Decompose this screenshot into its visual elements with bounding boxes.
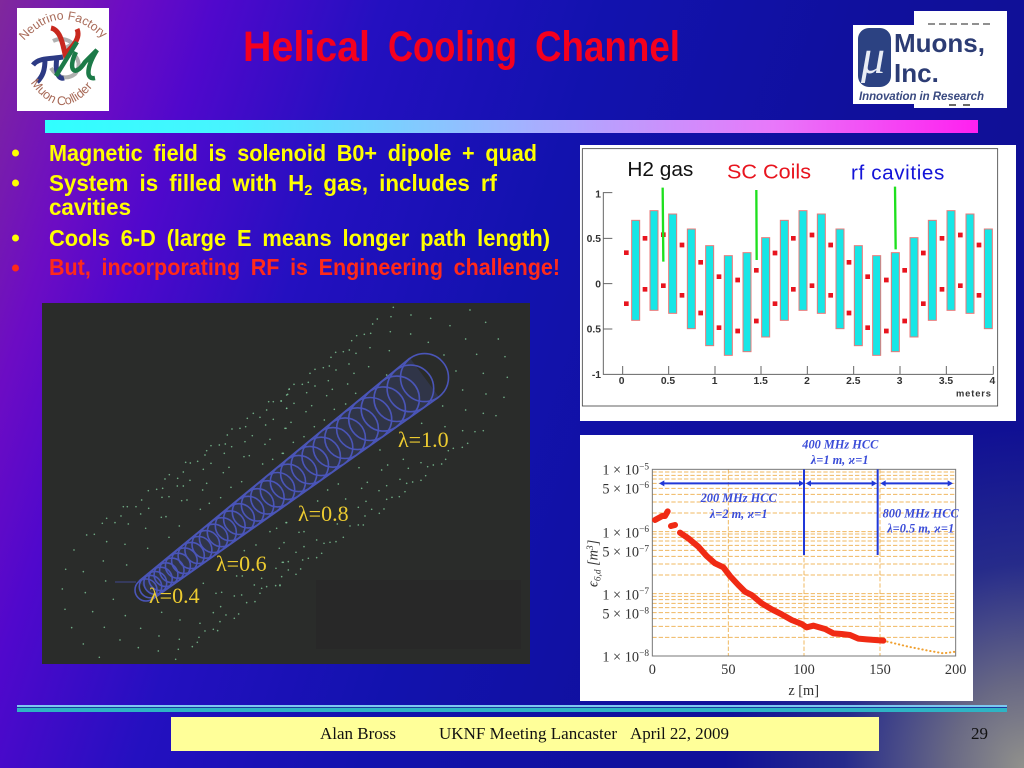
wavelength labels: λ=0.6: [216, 551, 267, 576]
axis labels: 1: [595, 190, 601, 201]
axis labels: 2: [804, 376, 810, 387]
emittance curve: [655, 511, 956, 653]
chart labels: H2 gas: [627, 158, 693, 181]
axis tick labels: 100: [793, 662, 815, 678]
frequency labels: [700, 438, 959, 536]
bullet list: System is filled with H: [49, 170, 312, 196]
axis labels: [587, 190, 995, 399]
axis tick labels: −5: [639, 462, 649, 472]
axis labels: meters: [956, 389, 991, 399]
frequency labels: λ=0.5 m, ϰ=1: [886, 522, 954, 536]
SC coil markers: [624, 235, 981, 331]
cavity bars: [632, 211, 992, 355]
axis tick labels: 1 × 10: [602, 463, 639, 479]
logo: Neutrino Factory Muon Collider: Muon Collider: [31, 78, 92, 106]
axis labels: 0: [595, 280, 601, 291]
bullet list: [12, 140, 560, 280]
green scatter dots: [62, 307, 507, 659]
footer text: April 22, 2009: [630, 724, 729, 743]
bullet list: 2: [304, 182, 312, 199]
title: Cooling: [388, 23, 517, 71]
bullet list: cavities: [49, 194, 131, 220]
logo: Muons, Inc.: μ: [860, 31, 885, 84]
axis tick labels: ϵ: [586, 581, 602, 587]
axis labels: 0.5: [661, 376, 675, 387]
axis labels: 0.5: [587, 325, 601, 336]
axis tick labels: 5 × 10: [602, 607, 639, 623]
axis labels: 1.5: [753, 376, 768, 387]
axis tick labels: 6,d: [593, 569, 603, 581]
frequency labels: 200 MHz HCC: [700, 491, 777, 505]
bullet list: Cools 6-D (large E means longer path length): [49, 225, 550, 251]
footer text: Alan Bross: [320, 724, 396, 743]
axis tick labels: −7: [639, 544, 649, 554]
axis tick labels: [586, 462, 966, 699]
axis labels: -1: [592, 370, 601, 381]
axis tick labels: ]: [586, 540, 602, 546]
axis tick labels: 1 × 10: [602, 587, 639, 603]
bullet list: Magnetic field is solenoid B0+ dipole + quad: [49, 140, 537, 166]
logo: Muons, Inc.: Inc.: [894, 58, 939, 88]
axis tick labels: 150: [869, 662, 891, 678]
axis labels: 0.5: [587, 234, 601, 245]
axis tick labels: 1 × 10: [602, 525, 639, 541]
panel: helix simulation image: [42, 303, 530, 664]
wavelength labels: [149, 427, 449, 608]
axis tick labels: 0: [649, 662, 656, 678]
logo: Muons, Inc.: Muons,: [894, 28, 985, 58]
frequency labels: λ=1 m, ϰ=1: [810, 453, 869, 467]
axis labels: 2.5: [846, 376, 861, 387]
axes: [603, 193, 993, 374]
axis labels: 0: [619, 376, 625, 387]
bullet list: gas, includes rf: [312, 170, 497, 196]
title: Channel: [535, 23, 680, 71]
axis tick labels: −7: [639, 587, 649, 597]
wavelength labels: λ=1.0: [398, 427, 449, 452]
footer text: [320, 724, 988, 743]
wavelength labels: λ=0.8: [298, 501, 349, 526]
blue helix coil: [115, 354, 448, 601]
logo: Neutrino Factory Muon Collider: [17, 8, 109, 111]
grid: [652, 469, 956, 656]
chart labels: rf cavities: [851, 161, 944, 184]
title: [243, 23, 680, 71]
gradient title bar: [45, 120, 978, 133]
axis tick labels: −6: [639, 525, 649, 535]
axis tick labels: −8: [639, 606, 649, 616]
panel: coil layout chart: [580, 145, 1016, 421]
axis tick labels: 50: [721, 662, 735, 678]
axis tick labels: [m: [586, 550, 602, 569]
frequency labels: 400 MHz HCC: [801, 438, 879, 452]
axis labels: 4: [989, 376, 995, 387]
footer rule: [17, 705, 1007, 712]
wavelength labels: λ=0.4: [149, 583, 200, 608]
title: Helical: [243, 23, 370, 71]
axis tick labels: 5 × 10: [602, 481, 639, 497]
logo: Muons, Inc.: [853, 11, 1007, 108]
chart labels: SC Coils: [727, 161, 811, 184]
axis tick labels: 1 × 10: [602, 649, 639, 665]
axis tick labels: 3: [586, 545, 596, 551]
frequency labels: 800 MHz HCC: [883, 506, 959, 520]
frequency labels: λ=2 m, ϰ=1: [709, 507, 768, 521]
logo: Neutrino Factory Muon Collider: Neutrino Factory: [18, 11, 107, 40]
axis labels: 1: [712, 376, 718, 387]
axis labels: 3: [897, 376, 903, 387]
axis labels: 3.5: [939, 376, 953, 387]
axis tick labels: −8: [639, 649, 649, 659]
green pointers: [663, 187, 896, 262]
frequency section markers: [662, 469, 950, 555]
axis tick labels: 5 × 10: [602, 545, 639, 561]
axis tick labels: −6: [639, 481, 649, 491]
footer text: UKNF Meeting Lancaster: [439, 724, 617, 743]
chart labels: [627, 158, 944, 184]
logo: Muons, Inc.: Innovation in Research: [859, 91, 984, 103]
axis tick labels: 200: [945, 662, 966, 678]
footer bar: [171, 717, 879, 751]
footer text: 29: [971, 724, 988, 743]
axis tick labels: z [m]: [788, 683, 819, 699]
panel: emittance chart: [580, 435, 973, 701]
